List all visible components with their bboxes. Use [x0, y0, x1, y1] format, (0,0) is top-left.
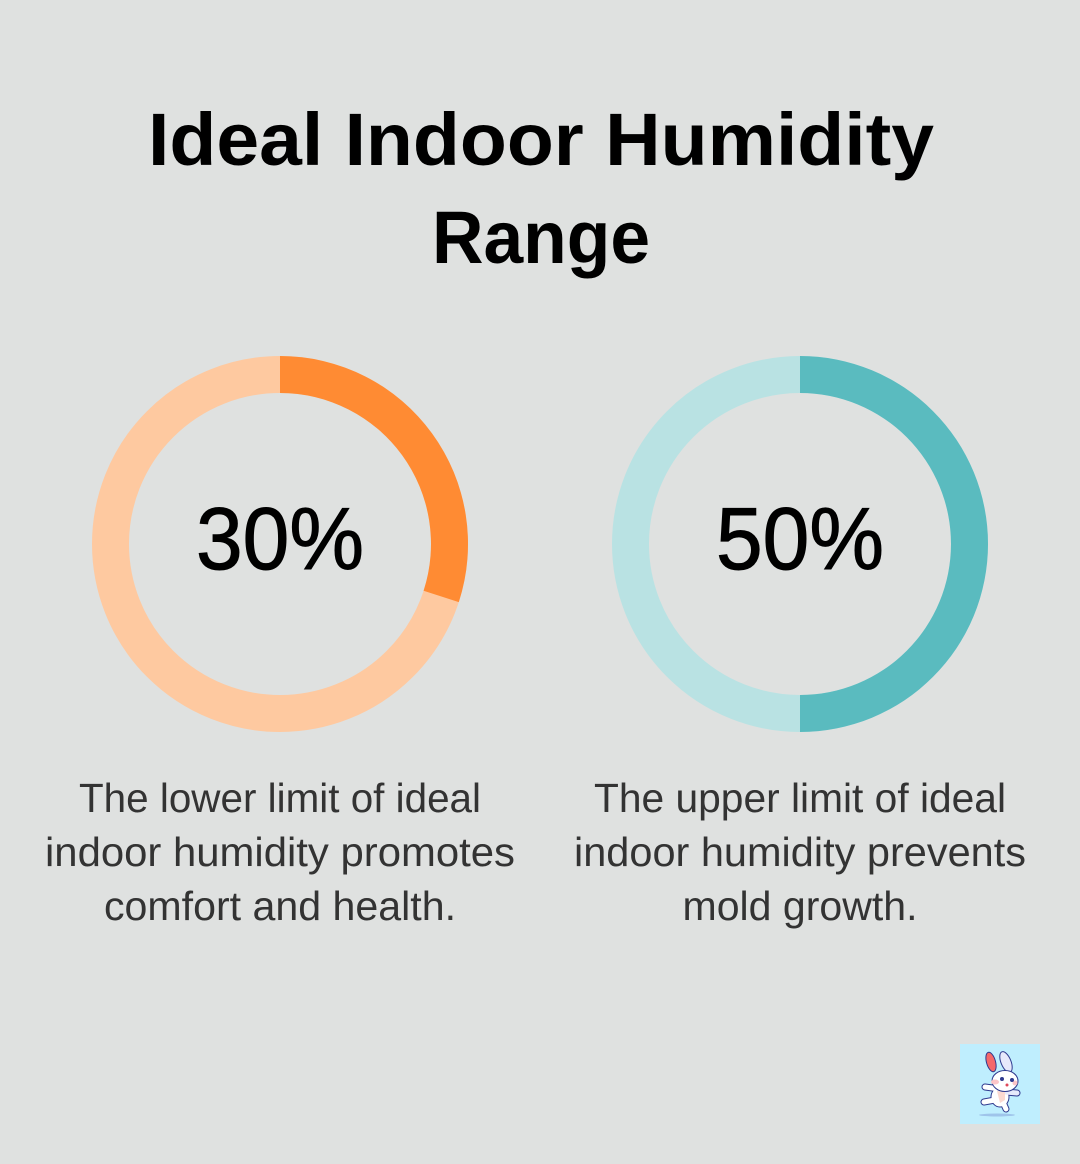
description: lower limit: The lower limit of ideal [79, 775, 481, 821]
description: upper limit [574, 775, 1026, 929]
title: Ideal Indoor Humidity [148, 98, 934, 181]
donut chart: 30% [110, 356, 468, 714]
donut chart: 50% [630, 356, 988, 732]
description: lower limit [45, 775, 515, 929]
title: Range [432, 196, 650, 279]
description: upper limit: mold growth. [682, 883, 918, 929]
icon: bunny logo [960, 1044, 1040, 1124]
value: 50%: 50% [716, 489, 884, 588]
description: lower limit: comfort and health. [104, 883, 456, 929]
title [148, 98, 934, 279]
description: upper limit: indoor humidity prevents [574, 829, 1026, 875]
value: 30%: 30% [196, 489, 364, 588]
panel: upper limit [574, 356, 1026, 929]
description: upper limit: The upper limit of ideal [594, 775, 1006, 821]
panel: lower limit [45, 356, 515, 929]
description: lower limit: indoor humidity promotes [45, 829, 515, 875]
